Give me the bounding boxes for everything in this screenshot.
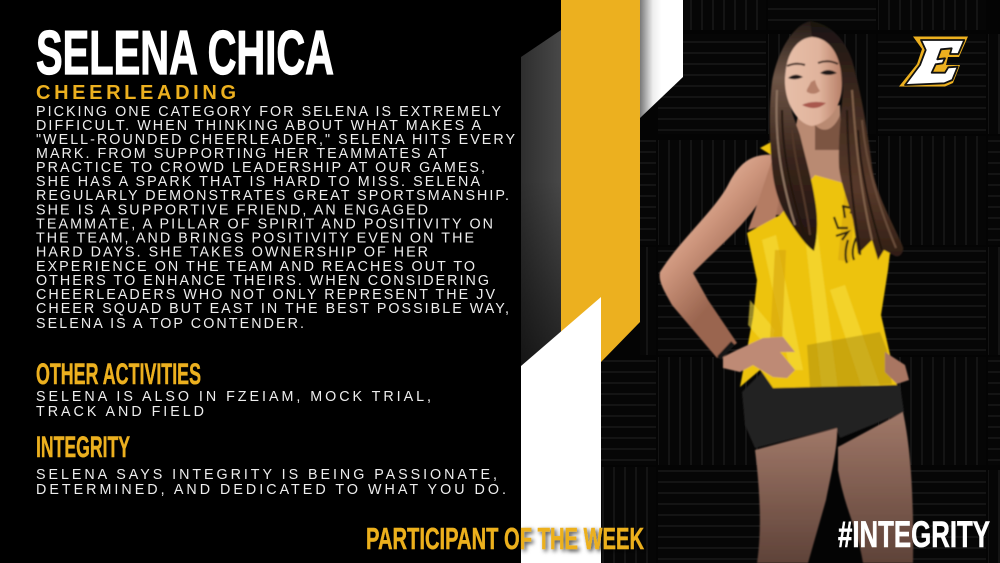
text block: main description: TEAMMATE, A PILLAR OF SPIRIT AND POSITIVITY ON	[36, 216, 493, 232]
arm	[660, 155, 785, 358]
text block: main description: "WELL-ROUNDED CHEERLEADER," SELENA HITS EVERY	[36, 132, 515, 148]
hand on hip	[723, 337, 795, 378]
text block: main description: MARK. FROM SUPPORTING HER TEAMMATES AT	[36, 146, 447, 162]
text block: main description	[36, 104, 515, 332]
footer label: participant of the week: PARTICIPANT OF THE WEEK	[366, 521, 644, 556]
text block: main description: PICKING ONE CATEGORY FOR SELENA IS EXTREMELY	[36, 104, 501, 120]
text block: main description: CHEERLEADERS WHO NOT ONLY REPRESENT THE JV	[36, 287, 495, 303]
text block: other activities: TRACK AND FIELD	[36, 404, 204, 420]
wristband	[719, 343, 733, 358]
text block: main description: DIFFICULT. WHEN THINKING ABOUT WHAT MAKES A	[36, 118, 481, 134]
neck and chest	[790, 105, 842, 190]
text block: main description: PRACTICE TO CROWD LEADERSHIP AT OUR GAMES,	[36, 160, 485, 176]
right hand	[885, 352, 909, 384]
text block: other activities: SELENA IS ALSO IN FZEIAM, MOCK TRIAL,	[36, 389, 431, 405]
heading: integrity: INTEGRITY	[36, 431, 130, 464]
title: SELENA CHICA	[36, 19, 334, 88]
hair strands	[776, 90, 896, 250]
left leg	[755, 428, 837, 563]
text block: integrity	[36, 467, 506, 498]
photo: athlete in yellow jersey	[660, 21, 913, 563]
shape: angled white top stripe	[640, 0, 683, 118]
shape: angled gray stripe	[521, 30, 561, 370]
text block: integrity: SELENA SAYS INTEGRITY IS BEING PASSIONATE,	[36, 467, 497, 483]
text block: main description: OTHERS TO ENHANCE THEIRS. WHEN CONSIDERING	[36, 273, 489, 289]
lion logo on jersey	[834, 205, 872, 263]
text block: main description: CHEER SQUAD BUT EAST IN THE BEST POSSIBLE WAY,	[36, 301, 509, 317]
panel: acoustic foam photo background	[600, 0, 1000, 563]
subtitle: CHEERLEADING	[36, 82, 236, 104]
text block: main description: SELENA IS A TOP CONTENDER.	[36, 316, 304, 332]
face	[785, 37, 842, 126]
shape: gold stripe	[561, 0, 640, 362]
right leg	[838, 412, 913, 563]
text block: other activities	[36, 389, 431, 420]
text block: main description: REGULARLY DEMONSTRATES GREAT SPORTSMANSHIP.	[36, 188, 509, 204]
shorts	[742, 372, 904, 448]
torso skin	[748, 160, 785, 230]
text block: main description: SHE HAS A SPARK THAT IS HARD TO MISS. SELENA	[36, 174, 480, 190]
eyes, nose, mouth	[787, 61, 838, 108]
logo: E	[899, 36, 968, 86]
text block: integrity: DETERMINED, AND DEDICATED TO WHAT YOU DO.	[36, 482, 506, 498]
right hair lock	[810, 21, 903, 260]
heading: other activities: OTHER ACTIVITIES	[36, 358, 201, 391]
text block: main description: SHE IS A SUPPORTIVE FRIEND, AN ENGAGED	[36, 202, 428, 218]
shape: white lower stripe	[521, 297, 601, 563]
left hair lock	[770, 21, 817, 251]
text block: main description: HARD DAYS. SHE TAKES OWNERSHIP OF HER	[36, 244, 428, 260]
text block: main description: THE TEAM, AND BRINGS POSITIVITY EVEN ON THE	[36, 230, 474, 246]
text block: main description: EXPERIENCE ON THE TEAM AND REACHES OUT TO	[36, 259, 475, 275]
jersey	[740, 141, 897, 390]
